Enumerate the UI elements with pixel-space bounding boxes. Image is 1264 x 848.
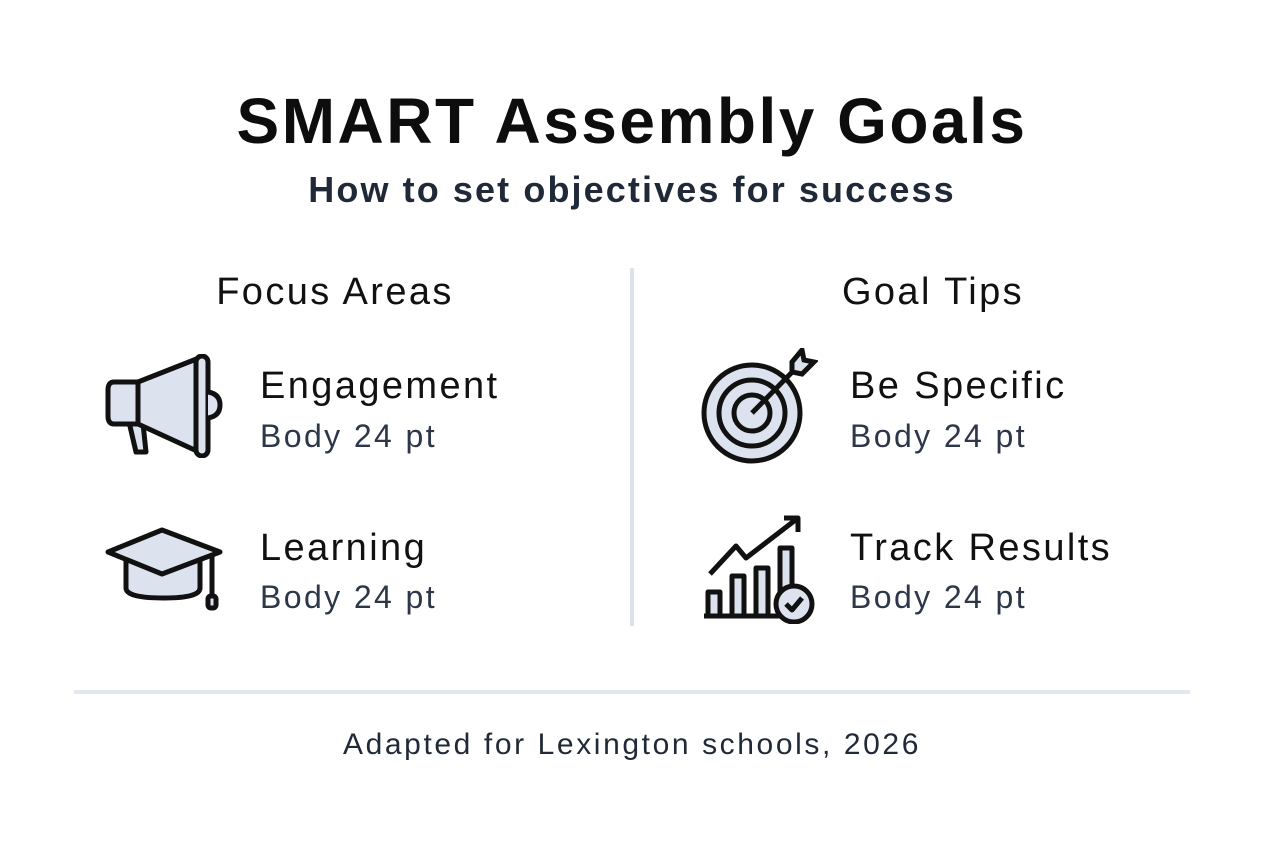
text: Body 24 pt	[260, 579, 437, 615]
text: learning: Learning	[260, 527, 427, 569]
footer: Adapted for Lexington schools, 2026	[343, 728, 921, 761]
icon: chart	[704, 516, 814, 624]
text: Body 24 pt	[850, 418, 1027, 454]
heading: goal tips: Goal Tips	[842, 271, 1024, 313]
column divider	[630, 268, 634, 626]
text: be specific: Be Specific	[850, 365, 1066, 407]
footer divider	[74, 690, 1190, 694]
text: track results: Track Results	[850, 527, 1112, 569]
heading: focus areas: Focus Areas	[216, 271, 454, 313]
icon: target	[702, 348, 818, 464]
text: Body 24 pt	[850, 579, 1027, 615]
text: Body 24 pt	[260, 418, 437, 454]
title: SMART Assembly Goals	[237, 85, 1027, 157]
subtitle: How to set objectives for success	[308, 169, 956, 210]
text: engagement: Engagement	[260, 365, 500, 407]
icon: graduation cap	[106, 528, 222, 610]
icon: megaphone	[106, 354, 222, 458]
